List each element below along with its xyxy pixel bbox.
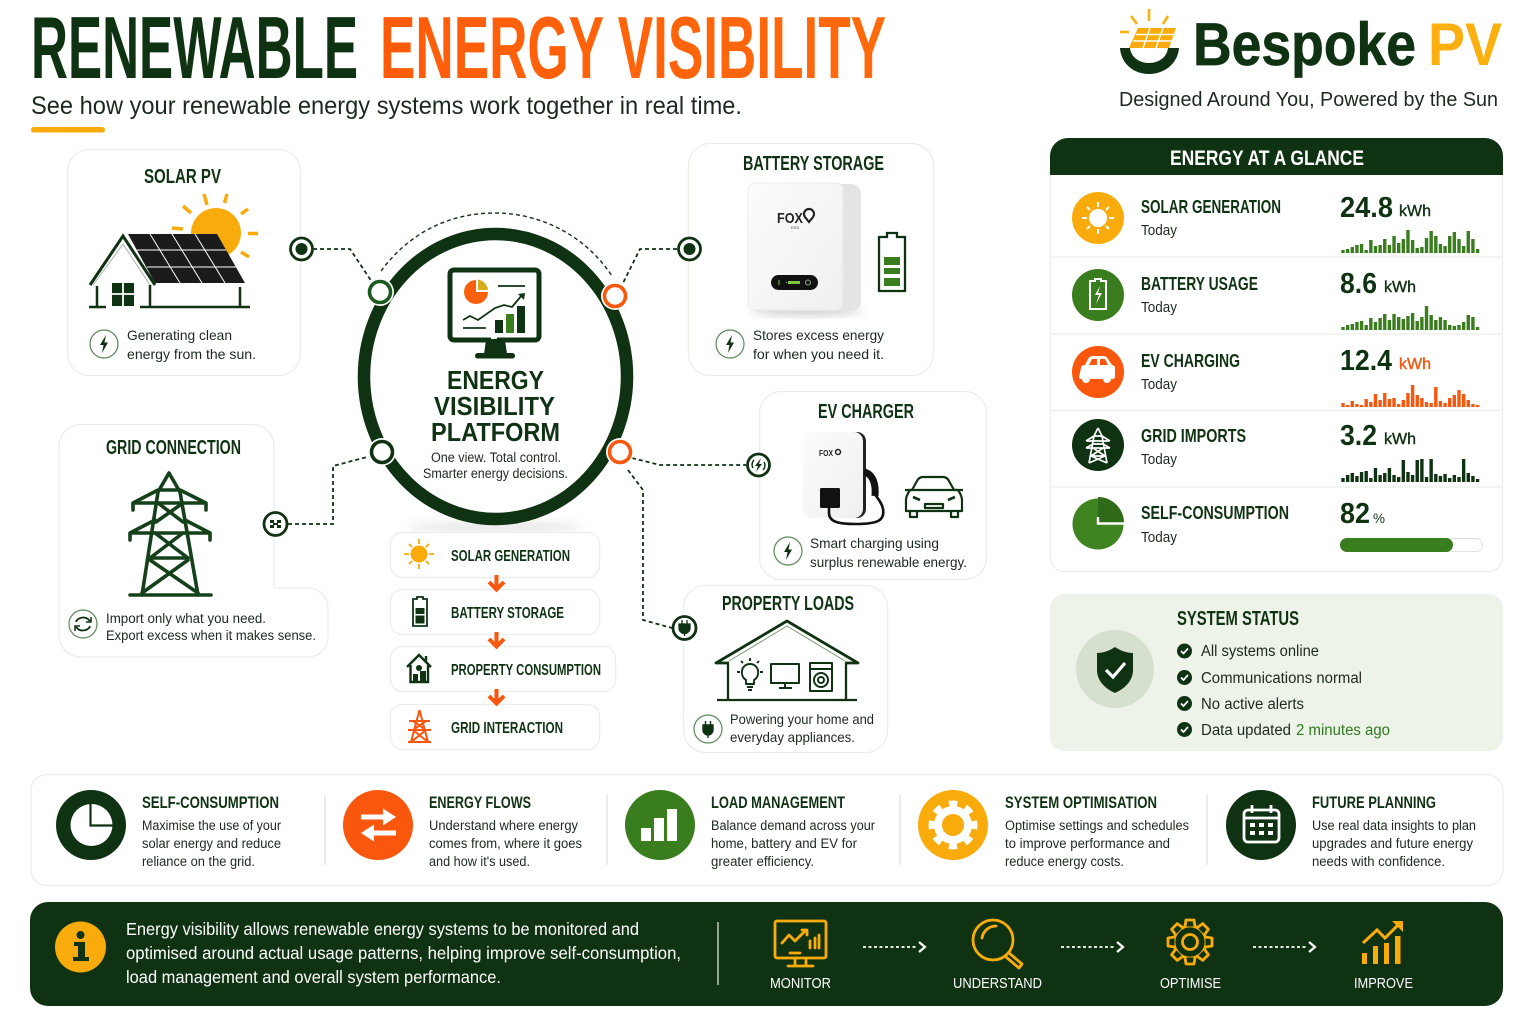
icon: bulb [737,658,763,690]
panel: EV charger [760,392,986,580]
arrow [1061,942,1123,952]
row: self-consumption: Today [1141,530,1178,546]
flow: solar generation [390,532,600,578]
benefit: load management: greater efficiency. [711,854,814,869]
panel header: ENERGY AT A GLANCE [1170,146,1364,170]
description: Smart charging using [810,535,939,551]
status list: Data updated [1201,722,1291,739]
battery unit: FOX [777,210,803,227]
panel: property loads [684,586,888,752]
row: grid imports: Today [1141,452,1178,468]
icon: pylon [130,473,211,595]
benefit: future planning: FUTURE PLANNING [1312,793,1436,812]
icon: rising chart [1362,921,1403,964]
flow: solar generation: SOLAR GENERATION [451,548,570,565]
battery unit: ESS [791,225,799,230]
connector: solar [313,249,372,282]
title [31,0,886,97]
description: surplus renewable energy. [810,554,967,570]
node: property [673,616,696,640]
platform heading: PLATFORM [431,419,560,447]
description: energy from the sun. [127,346,256,362]
platform heading [431,367,560,447]
summary text [126,919,681,987]
connector: battery [622,249,677,285]
description: Import only what you need. [106,611,266,626]
row: EV charging: Today [1141,377,1178,393]
row: solar generation: kWh [1399,203,1431,220]
heading: PROPERTY LOADS [722,593,854,615]
description [730,711,874,745]
icon: calendar [1226,790,1296,860]
panel: solar PV [68,150,300,376]
icon: dashboard monitor [450,270,539,358]
row: grid imports: GRID IMPORTS [1141,426,1246,446]
step: monitor [770,921,831,992]
step: optimise: OPTIMISE [1160,976,1221,992]
panel: grid connection [59,424,328,657]
row: solar generation: 24.8 [1340,192,1393,224]
benefit: self-consumption: SELF-CONSUMPTION [142,793,279,812]
node: EV [748,454,770,476]
platform tagline: Smarter energy decisions. [423,466,568,481]
flow arrows [489,575,504,704]
row: solar generation: Today [1141,223,1178,239]
dashed arc above the ring [381,213,612,276]
icon: house with solar panels [89,234,250,307]
row: EV charging: EV CHARGING [1141,351,1240,371]
node: solar [290,238,312,260]
summary text: Energy visibility allows renewable energy systems to be monitored and [126,919,639,939]
logo: Bespoke PV: Designed Around You, Powered by the Sun [1119,88,1498,111]
node: battery [678,238,700,260]
benefit: self-consumption: Maximise the use of your [142,818,281,833]
status list: 2 minutes ago [1296,722,1390,739]
row: self-consumption: % [1373,510,1385,526]
EV wallbox [803,432,883,524]
icon: house with appliances [716,621,858,700]
row: grid imports: 3.2 [1340,420,1377,452]
description: Generating clean [127,327,232,343]
sparkline [1343,385,1478,407]
progress bar [1340,538,1482,552]
description: Export excess when it makes sense. [106,628,316,643]
row: battery usage: 8.6 [1340,268,1377,300]
EV wallbox: FOX [819,449,834,458]
icon: sun [404,539,434,569]
row: EV charging [1072,345,1478,407]
row: battery usage: Today [1141,300,1178,316]
icon: battery [879,233,905,291]
arrow [863,942,925,952]
description [753,327,884,362]
row: grid imports [1072,419,1478,482]
benefit: load management: home, battery and EV for [711,836,857,851]
row: solar generation: SOLAR GENERATION [1141,197,1281,217]
flow: property consumption [390,646,616,692]
benefit: future planning [1226,790,1476,869]
icon: sun [172,194,258,258]
benefit: load management [625,790,875,869]
benefit: system optimisation: SYSTEM OPTIMISATION [1005,793,1157,812]
row: EV charging: 12.4 [1340,345,1392,377]
benefit: system optimisation: to improve performance and [1005,836,1170,851]
subtitle: See how your renewable energy systems work together in real time. [31,92,742,120]
heading: EV CHARGER [818,401,914,423]
status list: All systems online [1201,643,1319,660]
benefit: system optimisation [918,790,1189,869]
battery unit [748,183,862,313]
title: RENEWABLE [31,0,358,97]
benefit: energy flows: comes from, where it goes [429,836,582,851]
icon: car [905,477,963,517]
icon: pylon [408,710,431,742]
row: self-consumption [1072,497,1482,552]
row: battery usage: kWh [1384,279,1416,296]
flow: grid interaction: GRID INTERACTION [451,720,563,737]
icon: battery [413,597,427,626]
icon: pie [56,790,126,860]
heading: SOLAR PV [144,166,221,188]
panel: energy at a glance [1050,138,1503,572]
sparkline [1343,459,1478,482]
logo icon [1120,9,1179,74]
icon: arrows [343,790,413,860]
platform heading: ENERGY [447,367,544,395]
step: improve: IMPROVE [1354,976,1413,992]
central platform ring [364,234,634,533]
description: Powering your home and [730,711,874,727]
icon: bolt badge [774,537,802,565]
flow: battery storage: BATTERY STORAGE [451,605,564,622]
icon: monitor [775,921,826,966]
sparkline [1343,230,1478,253]
flow: property consumption: PROPERTY CONSUMPTION [451,662,601,679]
logo: Bespoke PV: Bespoke [1193,11,1416,78]
icon: battery [1072,269,1124,321]
icon: bars [625,790,695,860]
title accent bar [31,127,105,132]
icon: monitor [771,664,799,688]
heading: GRID CONNECTION [106,437,241,459]
icon: gear [918,790,988,860]
step: improve [1354,921,1413,992]
logo: Bespoke PV: PV [1428,11,1502,78]
description [106,611,316,643]
icon: washing machine [810,663,832,691]
summary text: optimised around actual usage patterns, helping improve self-consumption, [126,943,681,963]
icon: bolt badge [90,330,118,358]
platform heading: VISIBILITY [434,393,555,421]
benefit: energy flows: ENERGY FLOWS [429,793,531,812]
icon: plug badge [694,715,722,743]
benefit: energy flows: and how it's used. [429,854,530,869]
description: for when you need it. [753,346,884,362]
benefit: energy flows: Understand where energy [429,818,578,833]
connector: grid [288,456,371,524]
arrow [1253,942,1315,952]
step: understand: UNDERSTAND [953,976,1042,992]
heading: SYSTEM STATUS [1177,608,1299,630]
description [810,535,967,570]
row: solar generation [1072,192,1478,253]
status list: No active alerts [1201,696,1304,713]
benefit: load management: LOAD MANAGEMENT [711,793,845,812]
benefit: self-consumption: reliance on the grid. [142,854,255,869]
icon: car [1072,346,1124,398]
row: EV charging: kWh [1399,356,1431,373]
summary text: load management and overall system performance. [126,967,501,987]
sparkline [1343,306,1478,330]
node: grid [264,512,287,536]
icon: sun [1072,192,1124,244]
row: grid imports: kWh [1384,431,1416,448]
description [127,327,256,362]
benefit: energy flows [343,790,582,869]
title: ENERGY VISIBILITY [380,0,886,97]
benefit: system optimisation: Optimise settings and schedules [1005,818,1189,833]
icon: info [55,922,106,972]
platform tagline [423,450,568,481]
row: self-consumption: 82 [1340,498,1370,530]
panel: summary banner [30,902,1503,1006]
benefit: system optimisation: reduce energy costs. [1005,854,1124,869]
flow: battery storage [390,590,600,634]
step: monitor: MONITOR [770,976,831,992]
benefit: self-consumption: solar energy and reduce [142,836,281,851]
icon: house [407,655,431,682]
icon: exchange badge [69,610,97,638]
connector: EV charger [632,458,746,465]
panel: battery storage [688,144,934,376]
icon: gear [1168,920,1212,964]
benefit: load management: Balance demand across your [711,818,875,833]
panel: system status [1050,594,1503,751]
platform tagline: One view. Total control. [431,450,561,465]
flow: grid interaction [390,704,600,750]
benefit: future planning: needs with confidence. [1312,854,1445,869]
heading: BATTERY STORAGE [743,153,884,175]
icon: magnifier [973,920,1022,968]
step: understand [953,920,1042,992]
status list: Communications normal [1201,670,1362,687]
row: battery usage [1072,268,1478,330]
benefit: future planning: Use real data insights to plan [1312,818,1476,833]
description: everyday appliances. [730,729,855,745]
benefit: future planning: upgrades and future energy [1312,836,1473,851]
row: battery usage: BATTERY USAGE [1141,274,1258,294]
icon: pie [1072,497,1124,550]
icon: bolt badge [716,330,744,358]
logo: Bespoke PV [1119,9,1502,111]
ring nodes [366,278,634,466]
description: Stores excess energy [753,327,884,343]
status list [1177,643,1390,739]
icon: pylon [1072,419,1124,471]
connector: property loads [628,470,672,628]
panel header [1050,138,1503,175]
panel: benefits strip [31,774,1503,886]
benefit: self-consumption [56,790,281,869]
row: self-consumption: SELF-CONSUMPTION [1141,503,1289,523]
step: optimise [1160,920,1221,992]
icon: shield [1076,630,1154,708]
